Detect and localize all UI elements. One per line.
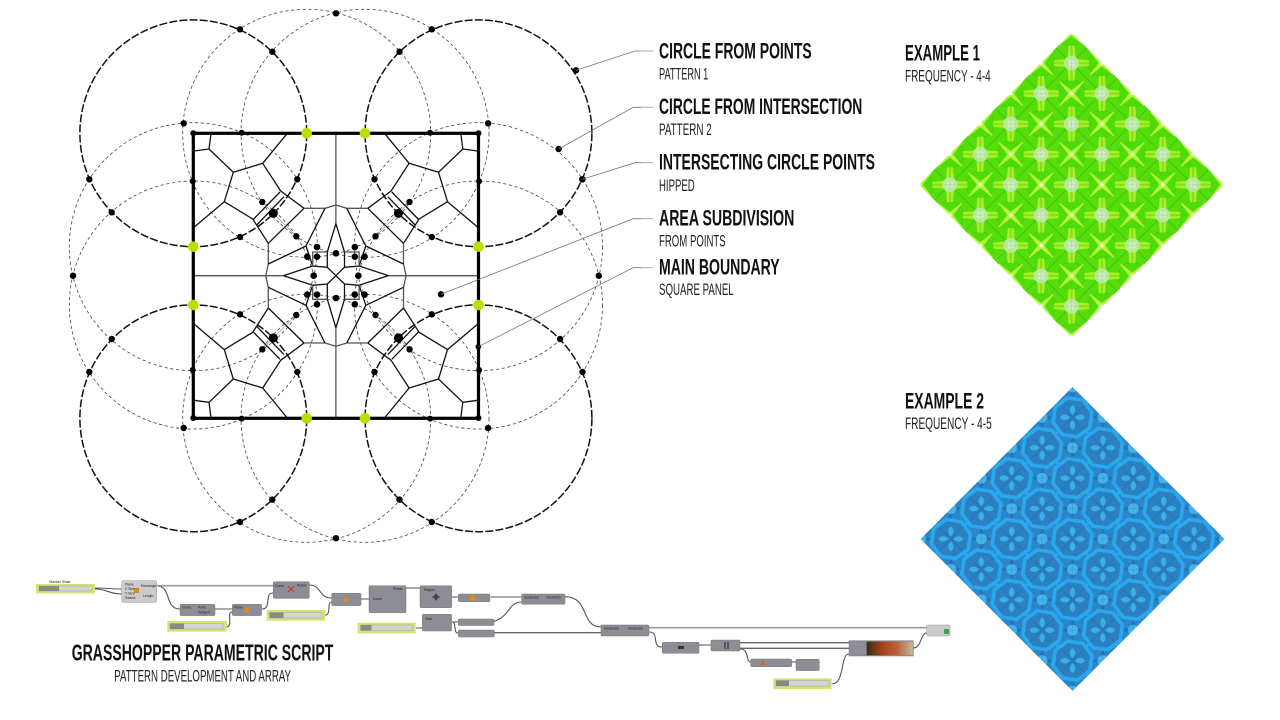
number slider 3 — [267, 610, 325, 621]
scale node: Start — [425, 617, 432, 621]
panel: circle geometry diagram — [69, 9, 603, 542]
callout: intersecting circle points — [579, 149, 875, 195]
area subdivision pattern with points — [86, 26, 586, 525]
deconstruct node — [711, 640, 740, 651]
area node — [662, 642, 699, 653]
green boundary points — [188, 128, 484, 424]
callout: circle from points: PATTERN 1 — [659, 64, 708, 83]
scale node — [422, 614, 452, 631]
move node 1 — [522, 594, 565, 604]
callout: main boundary — [476, 254, 780, 350]
surface node — [420, 586, 452, 608]
surface node: Region — [424, 588, 435, 592]
vector node — [796, 659, 819, 671]
rectangle node: Rectangle — [141, 584, 156, 588]
callout: main boundary: MAIN BOUNDARY — [659, 254, 780, 279]
green diamond pattern panel — [919, 32, 1224, 337]
area subdivision cross lines — [193, 133, 479, 418]
number slider 5 — [773, 678, 832, 689]
circle node: Plane — [234, 606, 243, 610]
multiple lines node — [369, 586, 406, 613]
rectangle node: Radius — [125, 596, 136, 600]
evaluate node: Tangent — [198, 610, 210, 614]
blue diamond pattern panel — [920, 387, 1224, 691]
evaluate node: Curve — [182, 606, 191, 610]
callout: circle from points — [573, 38, 812, 83]
title: grasshopper parametric script — [72, 640, 333, 686]
range node — [751, 659, 792, 667]
small output nodes — [458, 619, 494, 637]
main boundary square — [193, 133, 479, 418]
callout: circle from intersection: CIRCLE FROM INTERSECTION — [659, 94, 862, 119]
heading: example 1: EXAMPLE 1 — [905, 41, 980, 66]
boundary node — [458, 594, 490, 602]
axis points — [70, 10, 602, 541]
heading: example 2: EXAMPLE 2 — [905, 388, 984, 413]
callout: circle from intersection: PATTERN 2 — [659, 120, 712, 139]
number slider 1: Number Slider — [49, 580, 72, 584]
wires — [95, 585, 927, 684]
number slider 1 — [36, 580, 95, 593]
rectangle node: Y Size — [125, 592, 135, 596]
multiple lines node: Points — [393, 587, 403, 591]
heading: example 2 — [905, 388, 992, 433]
rectangle node: Length — [143, 594, 153, 598]
heading: example 2: FREQUENCY - 4-5 — [905, 414, 992, 433]
callout: area subdivision — [438, 206, 794, 297]
move node 2: Geometry — [628, 626, 643, 630]
circle node 2 — [332, 593, 361, 606]
evaluate node: Point — [198, 606, 206, 610]
evaluate node — [180, 604, 215, 616]
move node 1: Geometry — [546, 596, 561, 600]
divide node — [273, 582, 309, 598]
divide node: Curve — [275, 584, 284, 588]
move node 2 — [601, 625, 649, 636]
circle node — [232, 604, 262, 616]
callout: area subdivision: AREA SUBDIVISION — [659, 206, 794, 231]
multiple lines node: Curve — [373, 597, 382, 601]
heading: example 1: FREQUENCY - 4-4 — [905, 67, 991, 86]
callout: circle from intersection — [556, 94, 862, 152]
move node 2: Geometry — [604, 626, 619, 630]
grasshopper node script — [36, 580, 950, 689]
heading: example 1 — [905, 41, 991, 86]
callout: circle from points: CIRCLE FROM POINTS — [659, 38, 812, 63]
heavy dashed corner circles — [80, 20, 592, 532]
rectangle node: Plane — [125, 582, 134, 586]
move node 1: Geometry — [524, 596, 539, 600]
callout: intersecting circle points: INTERSECTING CIRCLE POINTS — [659, 149, 875, 174]
rectangle node: X Size — [125, 587, 135, 591]
callout: intersecting circle points: HIPPED — [659, 176, 695, 195]
gradient node — [849, 641, 913, 656]
title: grasshopper parametric script: PATTERN DEVELOPMENT AND ARRAY — [114, 667, 291, 686]
callout: main boundary: SQUARE PANEL — [659, 280, 734, 299]
custom preview node — [927, 625, 950, 636]
callout: area subdivision: FROM POINTS — [659, 232, 726, 251]
rectangle node — [122, 581, 157, 602]
number slider 2 — [167, 621, 227, 632]
thin dashed intersection circles — [69, 9, 603, 542]
title: grasshopper parametric script: GRASSHOPPER PARAMETRIC SCRIPT — [72, 640, 333, 666]
number slider 4 — [358, 623, 416, 633]
divide node: Points — [297, 584, 307, 588]
